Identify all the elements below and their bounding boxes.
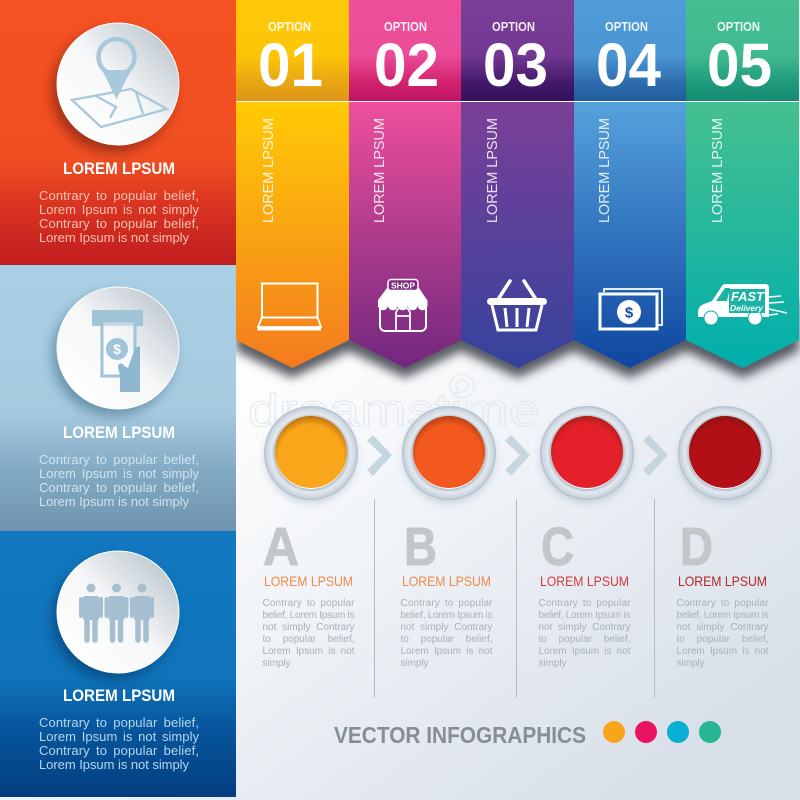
icon: map pin — [72, 39, 167, 127]
step text B: simply — [400, 658, 428, 669]
icon: fast delivery truck: FAST — [731, 289, 765, 304]
option column 3: LOREM LPSUM — [484, 118, 501, 223]
step text B: belief, Lorem Ipsum is — [400, 610, 492, 621]
step text B: Contrary to popular — [400, 598, 493, 609]
panel: light blue cash: Contrary to popular belief, — [39, 480, 199, 495]
step text A: simply — [262, 658, 290, 669]
option column 3: OPTION — [492, 20, 535, 34]
step text C: LOREM LPSUM — [540, 573, 629, 589]
option column 5: 05 — [707, 31, 772, 99]
icon: banknotes — [600, 289, 662, 329]
panel: blue people — [0, 531, 236, 797]
option column 5: OPTION — [717, 20, 760, 34]
step text B: not simply Contrary — [400, 622, 492, 633]
step text C: belief, Lorem Ipsum is — [538, 610, 630, 621]
panel: light blue cash: LOREM LPSUM — [63, 424, 175, 442]
panel: light blue cash: Lorem Ipsum is not simply — [39, 466, 200, 481]
panel: light blue cash: Lorem Ipsum is not simply — [39, 494, 190, 509]
column shadows — [236, 300, 799, 378]
step ring D — [678, 406, 772, 503]
footer title: VECTOR INFOGRAPHICS — [334, 722, 586, 748]
step text D: belief, Lorem Ipsum is — [676, 610, 768, 621]
panel: orange location: Contrary to popular belief, — [39, 216, 199, 231]
icon: cash machine — [92, 310, 143, 392]
icon: three people — [81, 584, 152, 640]
panel: blue people: Contrary to popular belief, — [39, 743, 199, 758]
step text B — [400, 517, 493, 669]
option column 2 — [349, 0, 461, 368]
step ring A — [264, 406, 358, 503]
step text C: C — [541, 517, 574, 577]
step text B: B — [404, 517, 437, 577]
step text C: to popular belief, — [538, 634, 630, 645]
step text D: not simply Contrary — [676, 622, 768, 633]
option column 5 — [686, 0, 799, 368]
step ring B — [402, 406, 496, 503]
step text D: LOREM LPSUM — [678, 573, 767, 589]
arrow: A to B — [367, 435, 392, 476]
arrow: B to C — [505, 435, 530, 476]
step text C: Lorem Ipsum is not — [538, 646, 631, 657]
watermark — [248, 374, 540, 436]
panel: light blue cash: Contrary to popular belief, — [39, 452, 199, 467]
step text D: to popular belief, — [676, 634, 768, 645]
step text C — [538, 517, 631, 669]
option column 4: 04 — [596, 31, 661, 99]
step text D: D — [680, 517, 713, 577]
icon: fast delivery truck — [698, 284, 787, 325]
panel: blue people: Lorem Ipsum is not simply — [39, 729, 200, 744]
option column 3: 03 — [483, 31, 548, 99]
step text A: not simply Contrary — [262, 622, 354, 633]
icon: banknotes: $ — [625, 304, 634, 322]
option column 3 — [461, 0, 574, 368]
option column 2: 02 — [374, 31, 439, 99]
option column 2: LOREM LPSUM — [371, 118, 388, 223]
step text A: to popular belief, — [262, 634, 354, 645]
step text D: Lorem Ipsum is not — [676, 646, 769, 657]
icon: laptop — [258, 284, 321, 330]
icon: cash machine: $ — [113, 341, 121, 357]
option column 2: OPTION — [384, 20, 427, 34]
option column 1: OPTION — [268, 20, 311, 34]
step text A — [262, 517, 355, 669]
arrow: C to D — [643, 435, 668, 476]
step text B: Lorem Ipsum is not — [400, 646, 493, 657]
step text D: simply — [676, 658, 704, 669]
option column 1 — [236, 0, 349, 368]
step text C: simply — [538, 658, 566, 669]
step text A: LOREM LPSUM — [264, 573, 353, 589]
option column 5: LOREM LPSUM — [709, 118, 726, 223]
watermark: dreamstime — [248, 384, 540, 436]
panel: orange location: Lorem Ipsum is not simply — [39, 202, 200, 217]
step text D: Contrary to popular — [676, 598, 769, 609]
panel: blue people: Contrary to popular belief, — [39, 715, 199, 730]
colour dots — [603, 721, 721, 743]
panel: orange location: LOREM LPSUM — [63, 160, 175, 178]
option column 4: OPTION — [605, 20, 648, 34]
step text A: belief, Lorem Ipsum is — [262, 610, 354, 621]
icon: shop: SHOP — [391, 280, 415, 290]
step text D — [676, 517, 769, 669]
panel: blue people: LOREM LPSUM — [63, 687, 175, 705]
step ring C — [540, 406, 634, 503]
panel: light blue cash — [0, 265, 236, 531]
option column 4: LOREM LPSUM — [596, 118, 613, 223]
option column 1: 01 — [258, 31, 323, 99]
icon: shop — [378, 280, 428, 331]
panel: orange location: Contrary to popular belief, — [39, 188, 199, 203]
step text A: Lorem Ipsum is not — [262, 646, 355, 657]
panel: orange location — [0, 0, 236, 265]
panel: orange location: Lorem Ipsum is not simply — [39, 230, 190, 245]
option column 1: LOREM LPSUM — [260, 118, 277, 223]
step text B: LOREM LPSUM — [402, 573, 491, 589]
step text C: Contrary to popular — [538, 598, 631, 609]
panel: blue people: Lorem Ipsum is not simply — [39, 757, 190, 772]
icon: basket — [487, 281, 547, 330]
step text C: not simply Contrary — [538, 622, 630, 633]
option column 4 — [574, 0, 686, 368]
icon: fast delivery truck: Delivery — [730, 303, 764, 313]
step text B: to popular belief, — [400, 634, 492, 645]
step text A: Contrary to popular — [262, 598, 355, 609]
step text A: A — [263, 517, 299, 577]
